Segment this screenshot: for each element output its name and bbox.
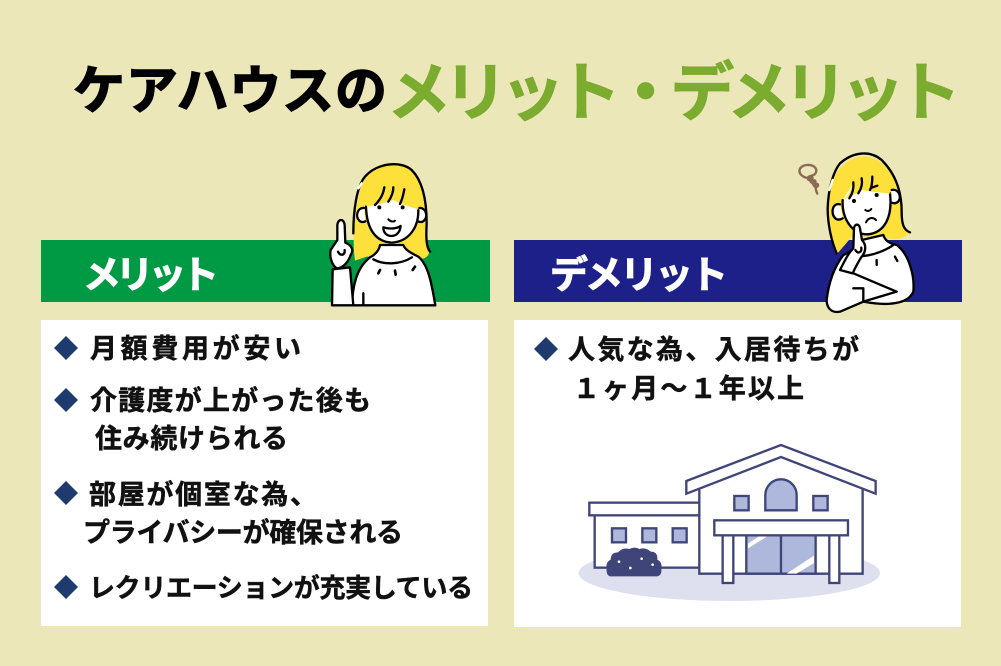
panel: demerit header: デメリット — [550, 254, 728, 297]
panel: demerit list — [514, 320, 961, 627]
bullet: stay after care level rises: 住み続けられる — [95, 424, 288, 454]
squiggle — [799, 165, 818, 194]
illustration: care house building — [579, 445, 880, 601]
title: メリット・デメリット — [387, 57, 961, 129]
illustration: woman pointing up — [330, 164, 435, 305]
bullet: waiting list: 人気な為、入居待ちが — [568, 334, 859, 365]
bullet: recreation: レクリエーションが充実している — [89, 573, 473, 603]
panel: merit header — [41, 240, 490, 302]
bullet: waiting list — [534, 334, 859, 404]
face — [357, 208, 365, 222]
bullet: stay after care level rises: 介護度が上がった後も — [90, 385, 371, 416]
panel: merit header: メリット — [83, 255, 219, 297]
arm and hand — [840, 225, 865, 273]
bullet: private rooms — [54, 479, 403, 548]
bullet: private rooms: プライバシーが確保される — [83, 517, 403, 548]
body — [827, 235, 914, 312]
bullet: private rooms: 部屋が個室な為、 — [89, 479, 317, 510]
title: ケアハウスの — [73, 63, 387, 121]
bullet: stay after care level rises — [54, 385, 371, 454]
bush — [606, 548, 662, 576]
body — [352, 245, 435, 305]
bullet: low monthly cost: 月額費用が安い — [90, 333, 301, 364]
bullet: waiting list: １ヶ月～１年以上 — [573, 374, 804, 404]
arm and hand — [332, 267, 353, 305]
illustration: woman thinking — [799, 153, 914, 312]
title — [73, 57, 961, 129]
face — [833, 204, 843, 220]
panel: demerit header — [514, 240, 962, 302]
panel: merit list — [41, 320, 488, 626]
